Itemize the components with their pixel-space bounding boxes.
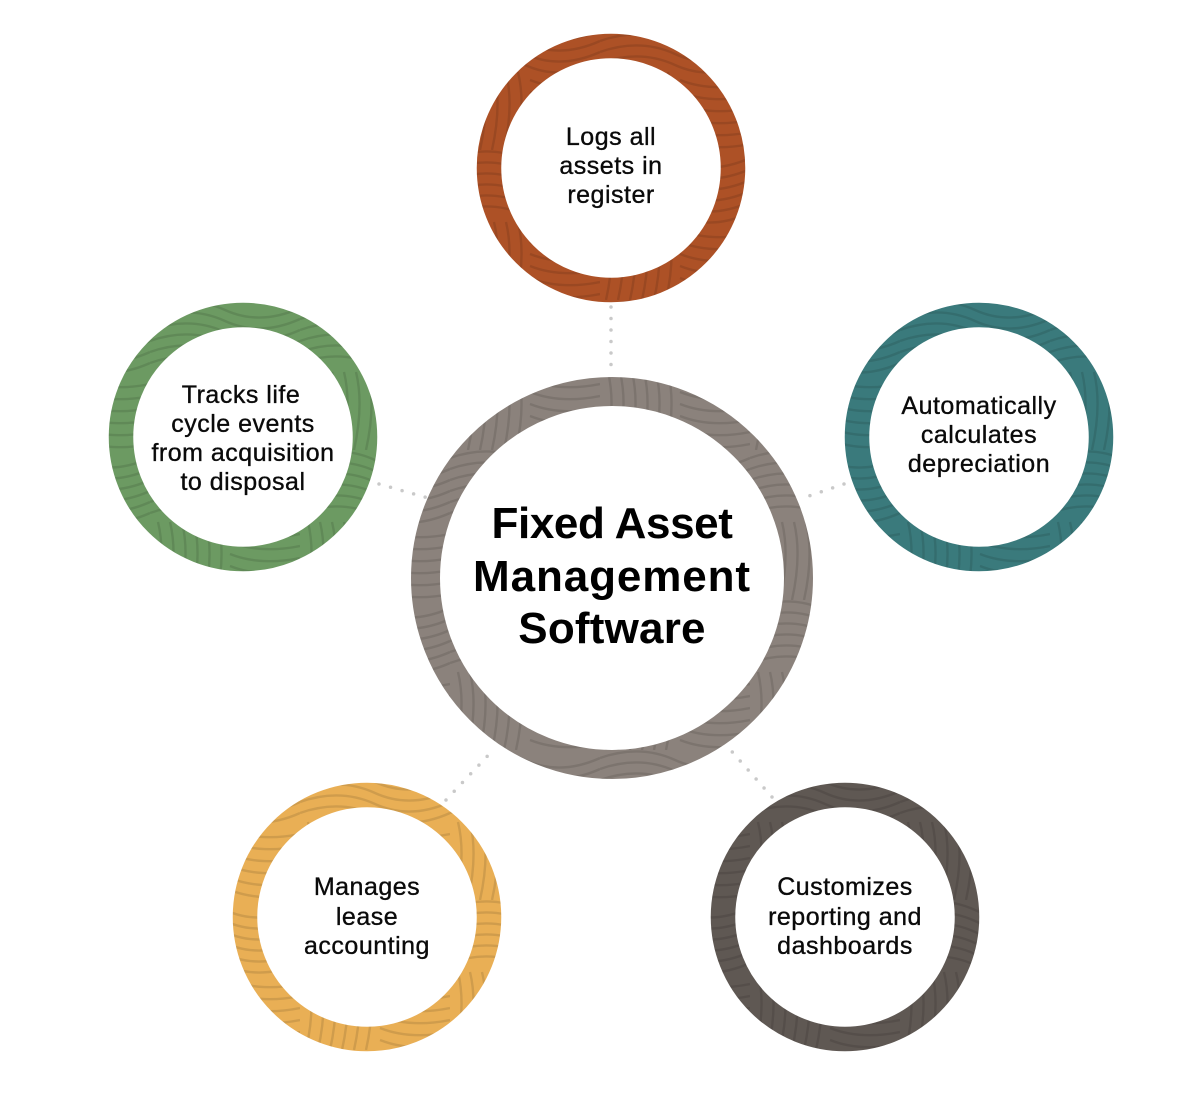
label: logs assets: register [567, 181, 655, 209]
title: Fixed Asset Management Software: Software [518, 604, 706, 653]
label: tracks life cycle: cycle events [171, 410, 315, 438]
connector: lower right dots [727, 746, 772, 797]
label: lease accounting: lease [336, 903, 398, 931]
label: tracks life cycle: to disposal [180, 468, 306, 496]
ring: lease accounting [245, 795, 489, 1039]
label: depreciation: depreciation [908, 450, 1050, 478]
label: reporting: reporting and [768, 903, 922, 931]
title: Fixed Asset Management Software: Management [473, 552, 751, 601]
ring: center [426, 392, 798, 764]
ring: logs assets [489, 46, 733, 290]
ring: tracks life cycle [121, 315, 365, 559]
label: logs assets: assets in [559, 152, 663, 180]
connector: left dots [379, 484, 428, 498]
label: logs assets: Logs all [566, 123, 656, 151]
label: reporting: dashboards [777, 932, 913, 960]
ring: depreciation [857, 315, 1101, 559]
label: depreciation: Automatically [901, 392, 1057, 420]
label: reporting: Customizes [777, 873, 913, 901]
label: lease accounting: accounting [304, 932, 430, 960]
label: tracks life cycle: from acquisition [151, 439, 335, 467]
connector: right dots [806, 484, 844, 497]
connector: top dots [609, 307, 613, 376]
label: lease accounting: Manages [314, 873, 420, 901]
connector: lower left dots [446, 748, 495, 800]
title: Fixed Asset Management Software: Fixed Asset [492, 499, 733, 548]
label: depreciation: calculates [921, 421, 1037, 449]
ring: reporting [723, 795, 967, 1039]
label: tracks life cycle: Tracks life [182, 381, 300, 409]
